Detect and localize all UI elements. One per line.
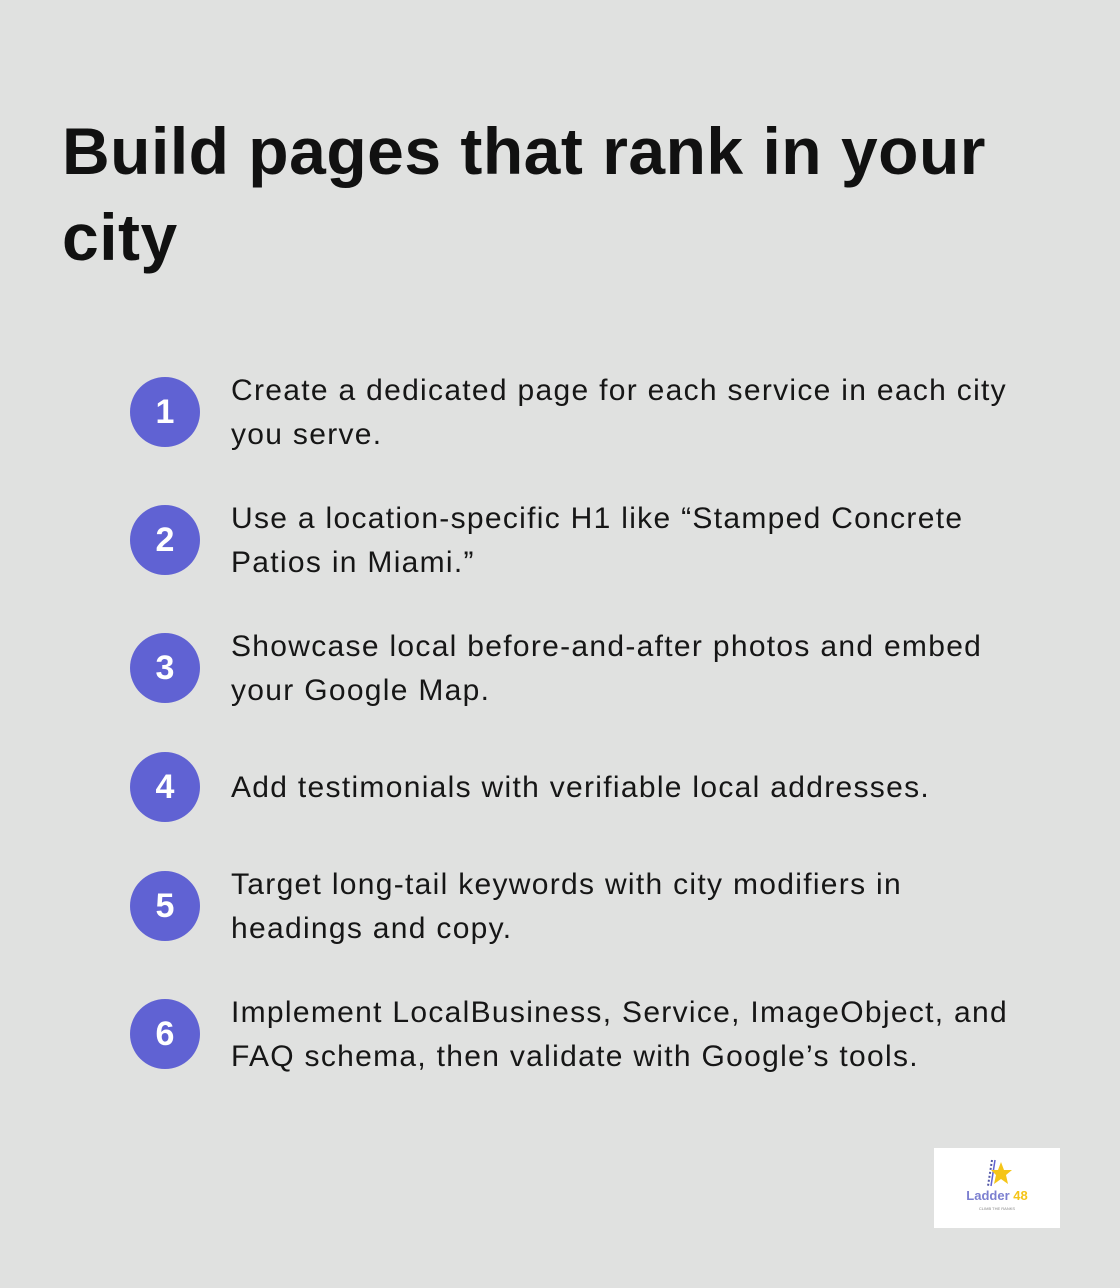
text 6 (231, 996, 1008, 1073)
item 1 (130, 374, 1007, 451)
text 2: Patios in Miami.” (231, 546, 475, 579)
circle 6: 6 (156, 1015, 174, 1053)
logo: CLIMB THE RANKS (979, 1206, 1015, 1211)
title (62, 114, 986, 274)
circle 2: 2 (156, 521, 174, 559)
item 5 (130, 868, 902, 945)
item 2 (130, 502, 963, 579)
text 6: Implement LocalBusiness, Service, ImageObject, and (231, 996, 1008, 1029)
text 3: your Google Map. (231, 674, 490, 707)
circle 6 (130, 999, 200, 1069)
item 3 (130, 630, 982, 707)
circle 4 (130, 752, 200, 822)
circle 2 (130, 505, 200, 575)
logo (934, 1148, 1060, 1228)
text 3: Showcase local before-and-after photos and embed (231, 630, 982, 663)
text 4: Add testimonials with verifiable local addresses. (231, 771, 930, 804)
title: Build pages that rank in your (62, 114, 986, 188)
circle 1: 1 (156, 393, 174, 431)
circle 3: 3 (156, 649, 174, 687)
circle 3 (130, 633, 200, 703)
text 3 (231, 630, 982, 707)
item 4 (130, 752, 930, 822)
title: city (62, 200, 178, 274)
text 5 (231, 868, 902, 945)
icon: star (987, 1160, 1012, 1186)
text 2: Use a location-specific H1 like “Stamped Concrete (231, 502, 963, 535)
text 6: FAQ schema, then validate with Google’s tools. (231, 1040, 919, 1073)
text 1: Create a dedicated page for each service in each city (231, 374, 1007, 407)
circle 5: 5 (156, 887, 174, 925)
text 5: Target long-tail keywords with city modifiers in (231, 868, 902, 901)
text 1: you serve. (231, 418, 382, 451)
item 6 (130, 996, 1008, 1073)
circle 4: 4 (156, 768, 174, 806)
text 2 (231, 502, 963, 579)
text 5: headings and copy. (231, 912, 512, 945)
text 1 (231, 374, 1007, 451)
logo text: Ladder 48 (966, 1188, 1028, 1203)
circle 5 (130, 871, 200, 941)
circle 1 (130, 377, 200, 447)
